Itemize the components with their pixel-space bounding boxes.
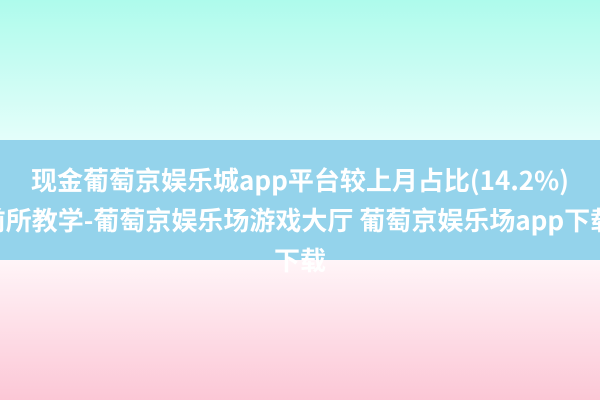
bottom gradient panel xyxy=(0,260,600,400)
top gradient panel xyxy=(0,0,600,140)
title text: 现金葡萄京娱乐城app平台较上月占比(14.2%) xyxy=(31,161,569,198)
blue title band xyxy=(0,140,600,260)
title text xyxy=(0,161,600,278)
title text: 下载 xyxy=(274,241,326,278)
